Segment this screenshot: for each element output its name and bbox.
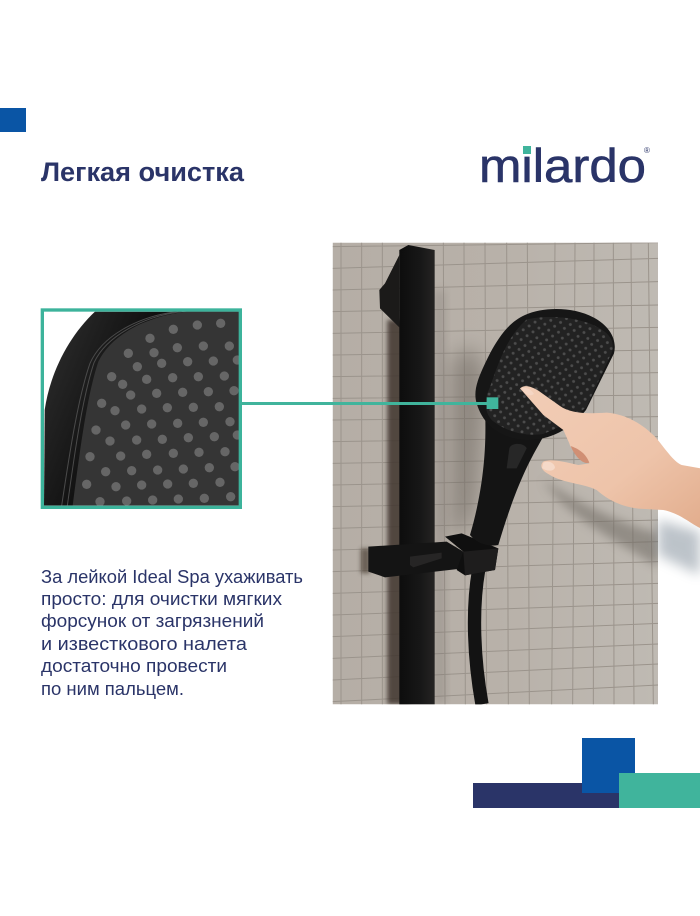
body text: достаточно провести — [41, 656, 227, 676]
nozzles — [82, 319, 242, 506]
hose — [475, 570, 482, 704]
logo: milardo: ® — [644, 146, 650, 155]
face grooves — [62, 312, 182, 506]
decorative blocks bottom right — [473, 738, 700, 808]
title: Легкая очистка — [41, 157, 245, 187]
nozzle face — [73, 312, 243, 506]
body text — [41, 567, 303, 699]
inset frame — [42, 310, 240, 507]
connector end marker — [487, 397, 498, 409]
handle button — [507, 444, 527, 468]
corner accent square — [0, 108, 26, 132]
photo: shower on tiled wall — [333, 243, 658, 704]
body text: по ним пальцем. — [41, 679, 184, 699]
connector line — [242, 402, 488, 405]
hand wall shadow — [543, 480, 658, 567]
body text: и известкового налета — [41, 634, 248, 654]
head shell — [44, 312, 243, 506]
rail bracket — [379, 255, 399, 327]
rail — [399, 245, 435, 704]
body text: просто: для очистки мягких — [41, 589, 282, 609]
hand — [520, 386, 700, 528]
hand shadow beyond photo — [658, 520, 700, 575]
shower head — [475, 309, 615, 440]
slider holder — [368, 533, 498, 577]
rail right soft shadow — [435, 290, 445, 704]
body text: форсунок от загрязнений — [41, 611, 264, 631]
body text: За лейкой Ideal Spa ухаживать — [41, 567, 303, 587]
shower head wall shadow — [450, 348, 487, 533]
holder wall shadow — [361, 548, 370, 573]
handle — [470, 417, 543, 546]
inset: nozzle close-up — [41, 308, 243, 509]
logo: milardo: milardo — [479, 139, 646, 192]
rail shadow — [387, 320, 410, 704]
tiled wall — [333, 243, 658, 704]
